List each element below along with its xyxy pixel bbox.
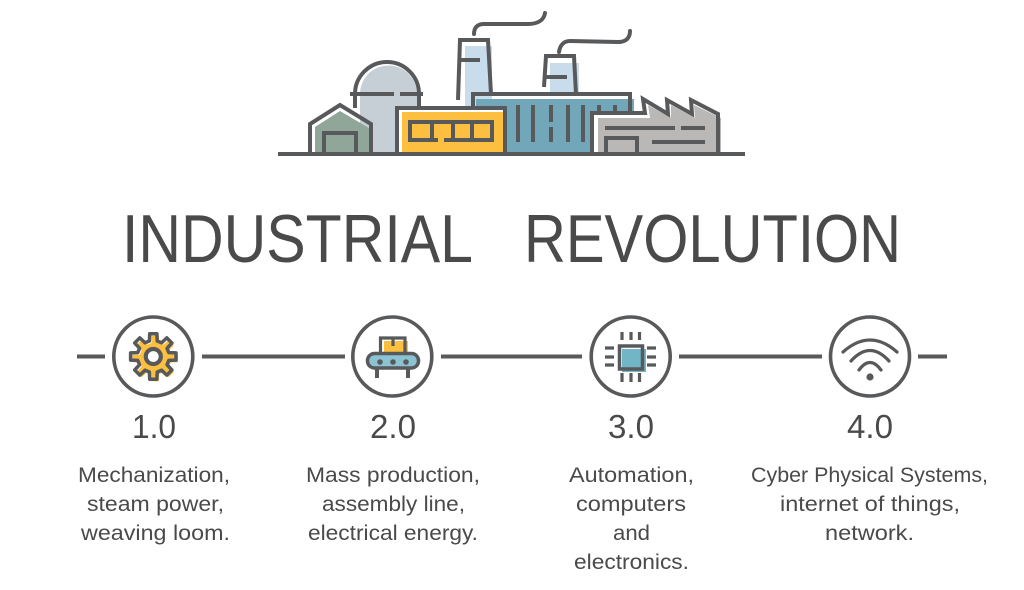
number: 3.0 [608,408,654,445]
chimney: tall stack [458,13,545,106]
title: INDUSTRIAL [122,201,473,277]
description [306,464,480,545]
description: Automation, [569,464,694,487]
icon: microchip [591,317,670,396]
description: steam power, [87,493,224,516]
description: Mechanization, [78,464,230,487]
description: network. [825,522,914,545]
description: electrical energy. [308,522,478,545]
step 4.0 [751,317,988,545]
building: blue hall [473,94,634,154]
description [78,464,230,545]
description [569,464,694,574]
building: grey sawtooth factory [592,99,721,154]
title: REVOLUTION [524,201,901,277]
number: 4.0 [847,408,893,445]
icon: wifi [830,317,910,396]
number: 2.0 [370,408,416,445]
chimney: short stack [544,31,630,95]
description: electronics. [574,551,689,574]
description [751,464,988,545]
illustration: factory skyline [278,13,745,154]
timeline connector [77,354,947,358]
description: and [613,522,650,545]
building: domed silo [350,62,423,154]
description: Mass production, [306,464,480,487]
description: weaving loom. [80,522,230,545]
step 2.0 [306,317,480,545]
ground line [278,152,745,156]
description: computers [576,493,686,516]
building: green warehouse [310,105,371,154]
icon: conveyor belt [353,317,432,396]
description: assembly line, [322,493,465,516]
building: yellow block [397,108,506,154]
description: Cyber Physical Systems, [751,464,988,487]
icon: gear [114,317,193,396]
number: 1.0 [132,408,176,445]
description: internet of things, [780,493,960,516]
title [122,201,901,277]
step 3.0 [569,317,694,574]
step 1.0 [78,317,230,545]
